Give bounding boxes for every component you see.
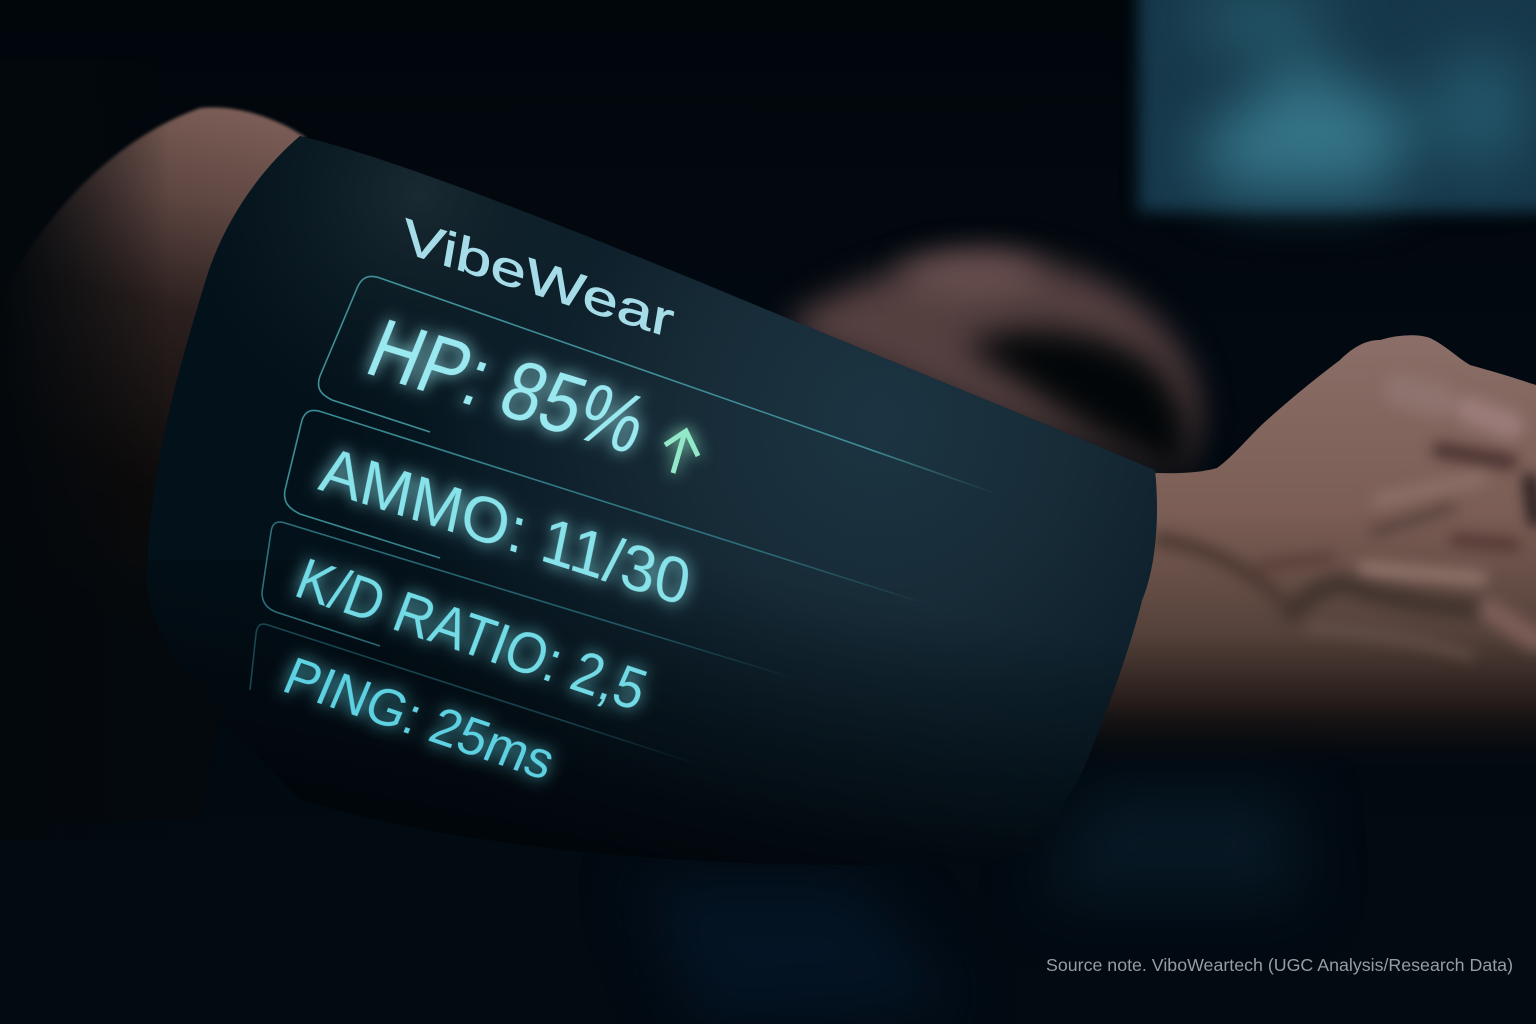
brand: VibeWear: VibeWear bbox=[398, 208, 678, 349]
panel: ammo outline bbox=[285, 410, 930, 605]
stat: K/D ratio: K/D RATIO: 2,5 bbox=[287, 546, 655, 723]
stat: ammo: AMMO: 11/30 bbox=[314, 432, 697, 620]
panel: K/D ratio outline bbox=[262, 522, 800, 680]
sleeve bbox=[140, 130, 1170, 870]
source note: Source note. ViboWeartech (UGC Analysis/Research Data) bbox=[1046, 955, 1513, 975]
forearm skin bbox=[0, 60, 305, 840]
panel: HP outline bbox=[318, 276, 1000, 495]
stat: ping: PING: 25ms bbox=[275, 647, 563, 791]
blurred background hand bbox=[790, 252, 1199, 480]
panel: display outlines bbox=[250, 276, 1000, 765]
blurred monitor bbox=[1138, 0, 1536, 212]
stat: HP: HP: 85% bbox=[355, 301, 660, 471]
foreground clothing bbox=[640, 790, 1300, 1024]
panel: ping outline bbox=[250, 624, 700, 765]
icon: up arrow bbox=[665, 431, 698, 473]
hand creases bbox=[1160, 390, 1536, 655]
hand and wrist bbox=[1095, 335, 1536, 742]
